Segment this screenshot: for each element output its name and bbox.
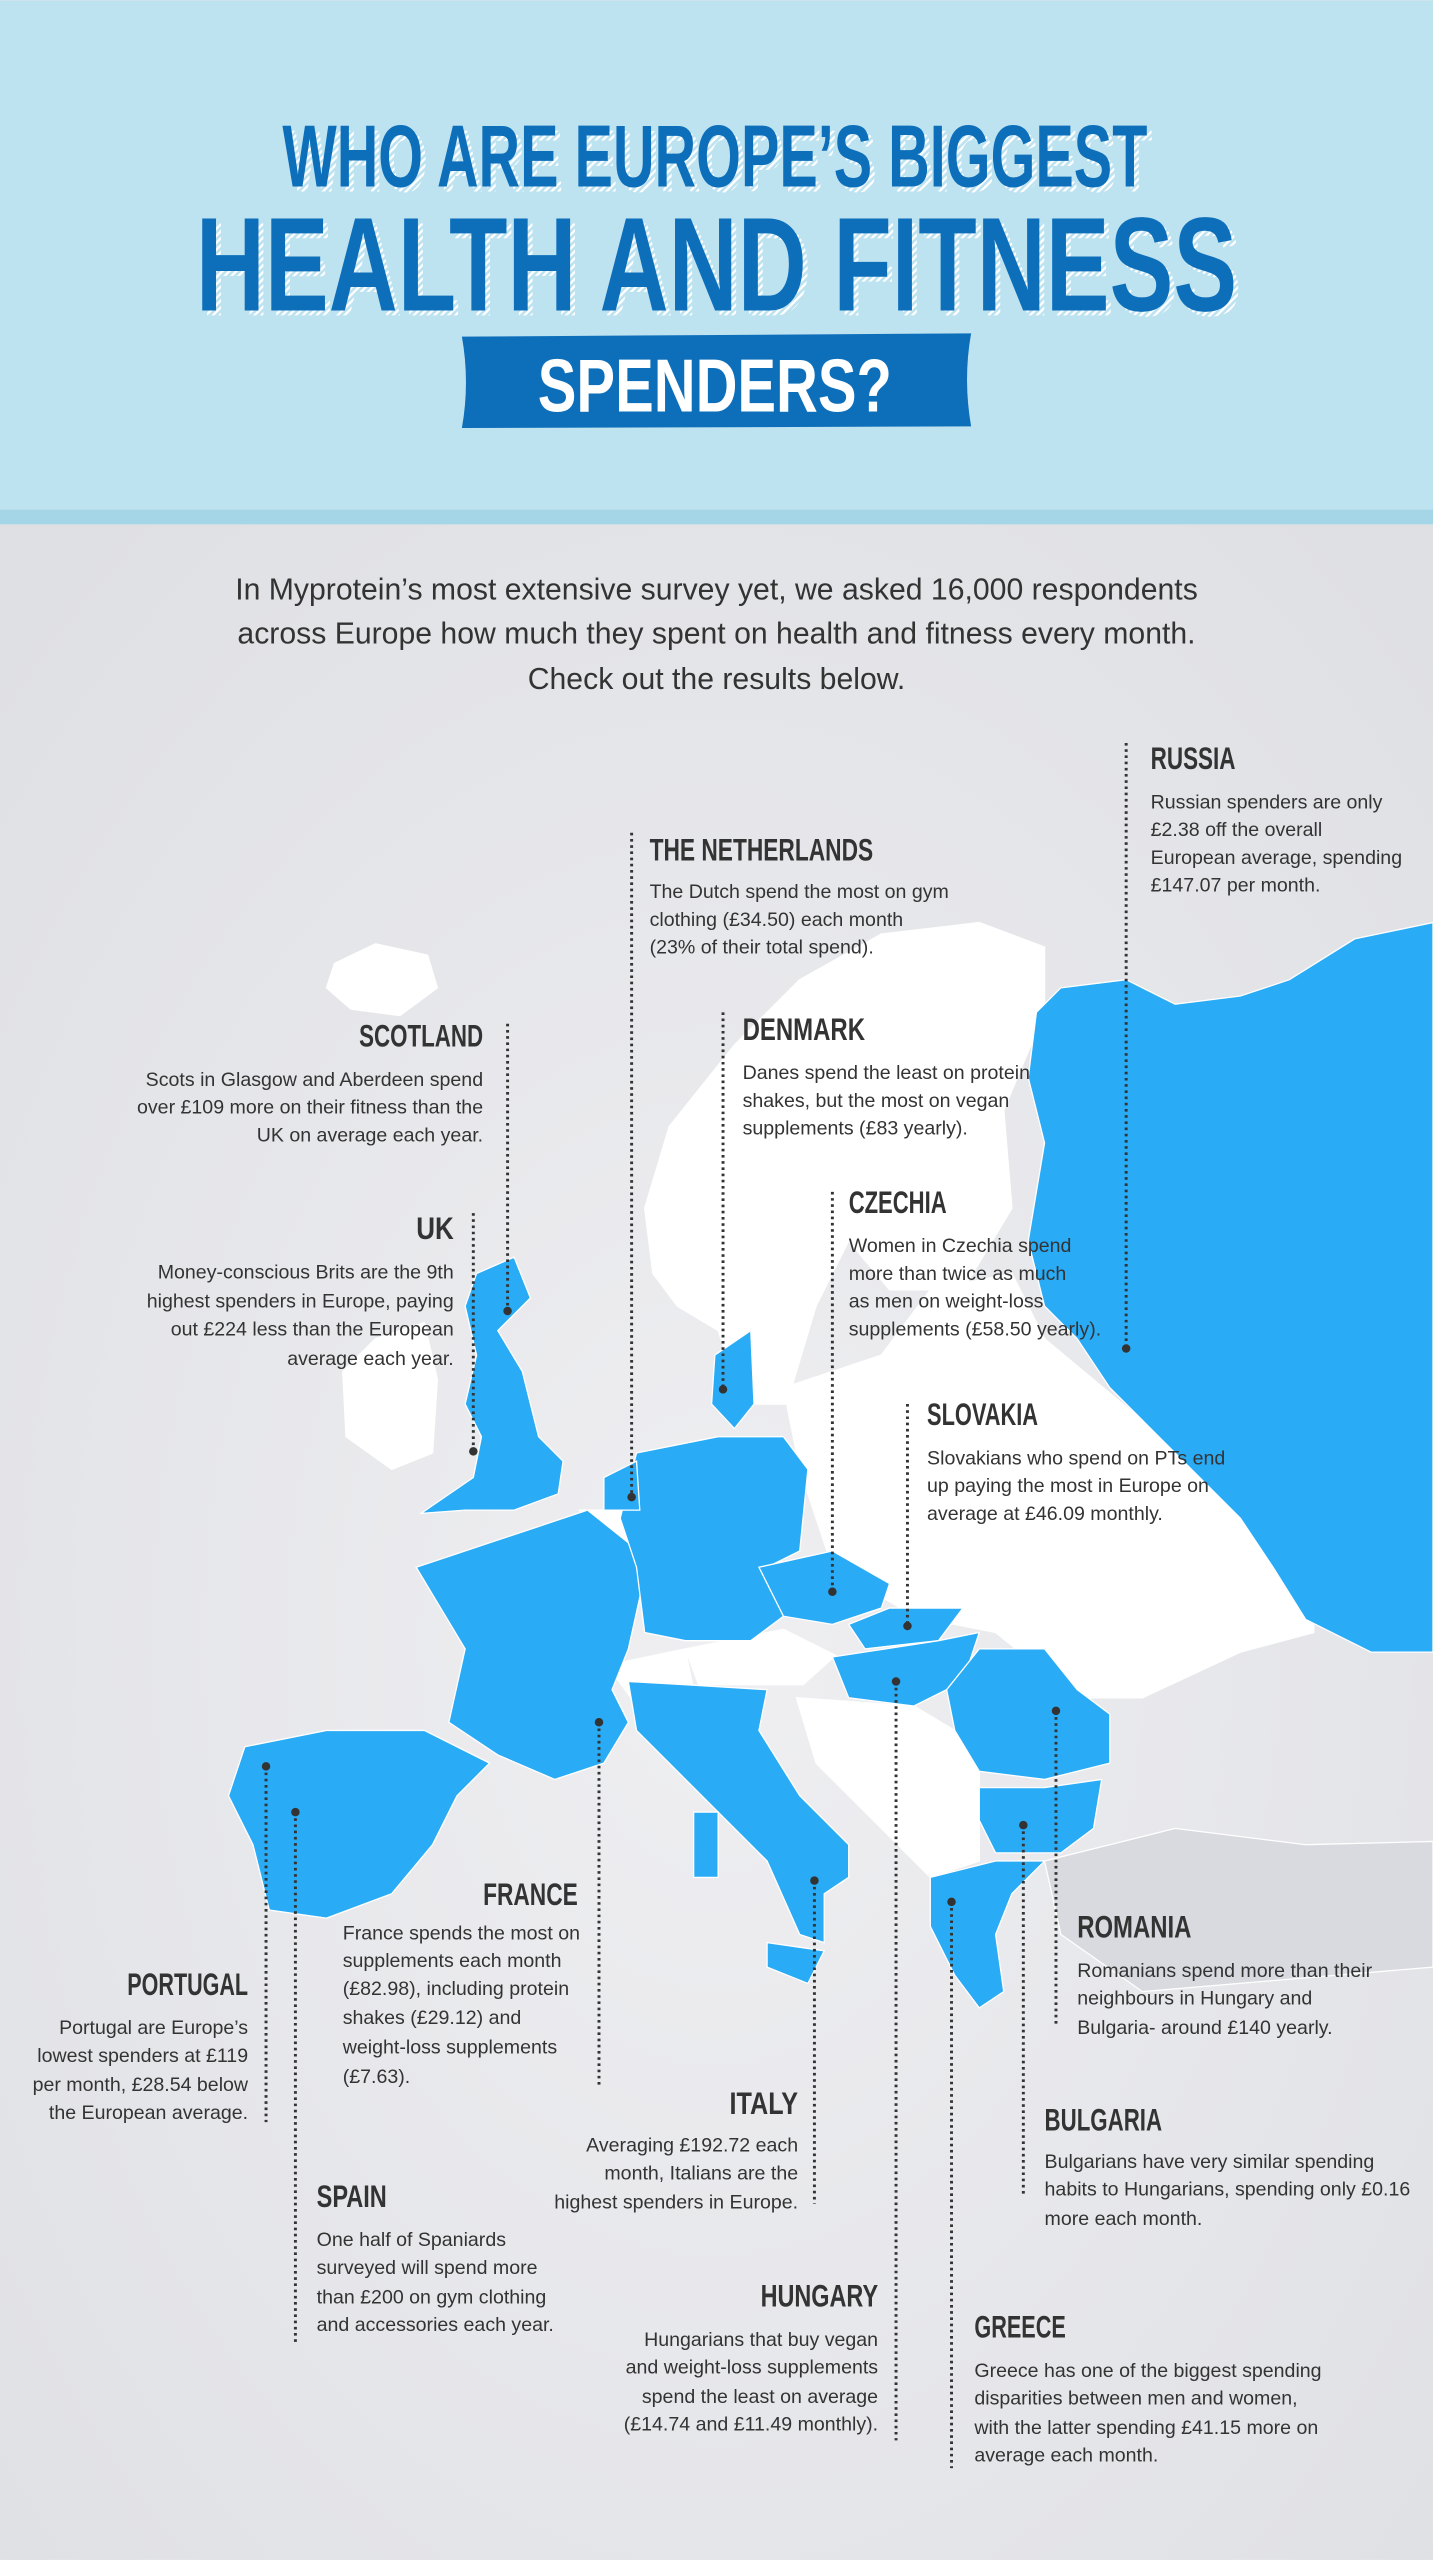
callout: russia: £147.07 per month. xyxy=(1151,875,1320,897)
callout: bulgaria xyxy=(1045,2102,1410,2230)
callout: france: supplements each month xyxy=(343,1950,562,1972)
callout: greece: with the latter spending £41.15 more on xyxy=(973,2417,1318,2439)
callout: france: weight-loss supplements xyxy=(342,2037,557,2059)
callout: russia: European average, spending xyxy=(1151,847,1402,869)
callout: france: FRANCE xyxy=(483,1877,578,1912)
callout: portugal: per month, £28.54 below xyxy=(33,2074,249,2096)
callout: spain: than £200 on gym clothing xyxy=(317,2286,546,2308)
callout: portugal: the European average. xyxy=(49,2102,248,2124)
callout: greece: GREECE xyxy=(974,2310,1066,2345)
callout: russia: £2.38 off the overall xyxy=(1151,819,1322,841)
callout: czechia: Women in Czechia spend xyxy=(849,1235,1071,1257)
callout: romania: ROMANIA xyxy=(1077,1910,1191,1945)
callout: slovakia: Slovakians who spend on PTs end xyxy=(927,1447,1225,1469)
callout: spain: SPAIN xyxy=(317,2179,387,2214)
callout: romania xyxy=(1077,1910,1373,2039)
callout: greece: Greece has one of the biggest spending xyxy=(974,2360,1322,2382)
callout: italy: month, Italians are the xyxy=(604,2162,798,2184)
callout: france: (£7.63). xyxy=(343,2066,410,2088)
callout: bulgaria: more each month. xyxy=(1045,2208,1202,2230)
intro text: Check out the results below. xyxy=(528,663,905,696)
callout: france: France spends the most on xyxy=(343,1922,580,1944)
callout: scotland: UK on average each year. xyxy=(257,1124,483,1146)
callout: greece: disparities between men and women, xyxy=(974,2388,1298,2410)
callout: hungary: HUNGARY xyxy=(761,2279,878,2314)
callout: netherlands: (23% of their total spend). xyxy=(650,937,874,959)
callout: france: (£82.98), including protein xyxy=(343,1978,569,2000)
callout: russia: RUSSIA xyxy=(1151,741,1236,776)
callout: scotland: Scots in Glasgow and Aberdeen spend xyxy=(146,1069,483,1091)
title xyxy=(196,106,1242,344)
callout: denmark: supplements (£83 yearly). xyxy=(743,1118,968,1140)
callout: slovakia: up paying the most in Europe on xyxy=(927,1475,1209,1497)
callout: hungary: spend the least on average xyxy=(642,2386,878,2408)
callout: slovakia xyxy=(927,1397,1225,1525)
callout: greece xyxy=(973,2310,1322,2467)
callout: denmark: Danes spend the least on protein xyxy=(743,1062,1030,1084)
callout: czechia: as men on weight-loss xyxy=(849,1291,1044,1313)
callout: romania: Romanians spend more than their xyxy=(1077,1960,1373,1982)
callout: hungary: (£14.74 and £11.49 monthly). xyxy=(624,2414,878,2436)
callout: netherlands: clothing (£34.50) each month xyxy=(650,909,903,931)
callout: uk: UK xyxy=(416,1211,454,1246)
callout: spain xyxy=(317,2179,554,2336)
callout: denmark: DENMARK xyxy=(743,1012,865,1047)
callout: italy: Averaging £192.72 each xyxy=(586,2135,798,2157)
callout: spain: and accessories each year. xyxy=(317,2314,554,2336)
callout: portugal: Portugal are Europe’s xyxy=(59,2017,248,2039)
callout: bulgaria: habits to Hungarians, spending only £0.16 xyxy=(1045,2179,1410,2201)
callout: romania: neighbours in Hungary and xyxy=(1077,1988,1312,2010)
callout: uk: highest spenders in Europe, paying xyxy=(147,1291,454,1313)
callout: netherlands: The Dutch spend the most on gym xyxy=(650,881,949,903)
callout: spain: One half of Spaniards xyxy=(317,2229,506,2251)
callout: france xyxy=(342,1877,580,2088)
callout: bulgaria: BULGARIA xyxy=(1045,2102,1162,2137)
ribbon: spenders: SPENDERS? xyxy=(538,344,892,428)
callout: portugal: lowest spenders at £119 xyxy=(37,2045,248,2067)
map of europe xyxy=(228,923,1433,2008)
callout: hungary: Hungarians that buy vegan xyxy=(644,2329,878,2351)
callout: portugal: PORTUGAL xyxy=(127,1967,248,2002)
callout: italy: ITALY xyxy=(730,2086,798,2121)
callout: russia xyxy=(1151,741,1402,897)
callout: czechia: more than twice as much xyxy=(849,1263,1066,1285)
callout: uk xyxy=(147,1211,454,1370)
intro text xyxy=(235,573,1198,696)
callout: czechia xyxy=(849,1185,1101,1340)
callout: uk: out £224 less than the European xyxy=(171,1318,454,1340)
callout: uk: average each year. xyxy=(287,1348,454,1370)
intro text: across Europe how much they spent on health and fitness every month. xyxy=(237,617,1196,650)
callout: netherlands: THE NETHERLANDS xyxy=(650,833,873,868)
callout: russia: Russian spenders are only xyxy=(1151,791,1383,813)
callout: uk: Money-conscious Brits are the 9th xyxy=(158,1261,454,1283)
callout: romania: Bulgaria- around £140 yearly. xyxy=(1077,2017,1333,2039)
callout: scotland: over £109 more on their fitness than the xyxy=(137,1097,483,1119)
callout: slovakia: average at £46.09 monthly. xyxy=(927,1503,1163,1525)
callout: bulgaria: Bulgarians have very similar spending xyxy=(1045,2151,1374,2173)
callout: france: shakes (£29.12) and xyxy=(343,2007,521,2029)
callout: denmark: shakes, but the most on vegan xyxy=(743,1090,1009,1112)
callout: scotland: SCOTLAND xyxy=(359,1019,483,1054)
callout: czechia: supplements (£58.50 yearly). xyxy=(849,1318,1101,1340)
callout: italy xyxy=(554,2086,798,2214)
callout: hungary xyxy=(624,2279,878,2436)
callout: spain: surveyed will spend more xyxy=(317,2257,538,2279)
header band xyxy=(0,0,1433,524)
callout: scotland xyxy=(137,1019,483,1146)
callout: slovakia: SLOVAKIA xyxy=(927,1397,1038,1432)
leader lines xyxy=(262,743,1130,2468)
callout: netherlands xyxy=(650,833,949,959)
callout: greece: average each month. xyxy=(974,2445,1158,2467)
callout: portugal xyxy=(33,1967,249,2124)
callout: denmark xyxy=(743,1012,1030,1140)
callout: czechia: CZECHIA xyxy=(849,1185,947,1220)
callout: italy: highest spenders in Europe. xyxy=(554,2192,798,2214)
callout: hungary: and weight-loss supplements xyxy=(626,2357,878,2379)
intro text: In Myprotein’s most extensive survey yet, we asked 16,000 respondents xyxy=(235,573,1198,606)
